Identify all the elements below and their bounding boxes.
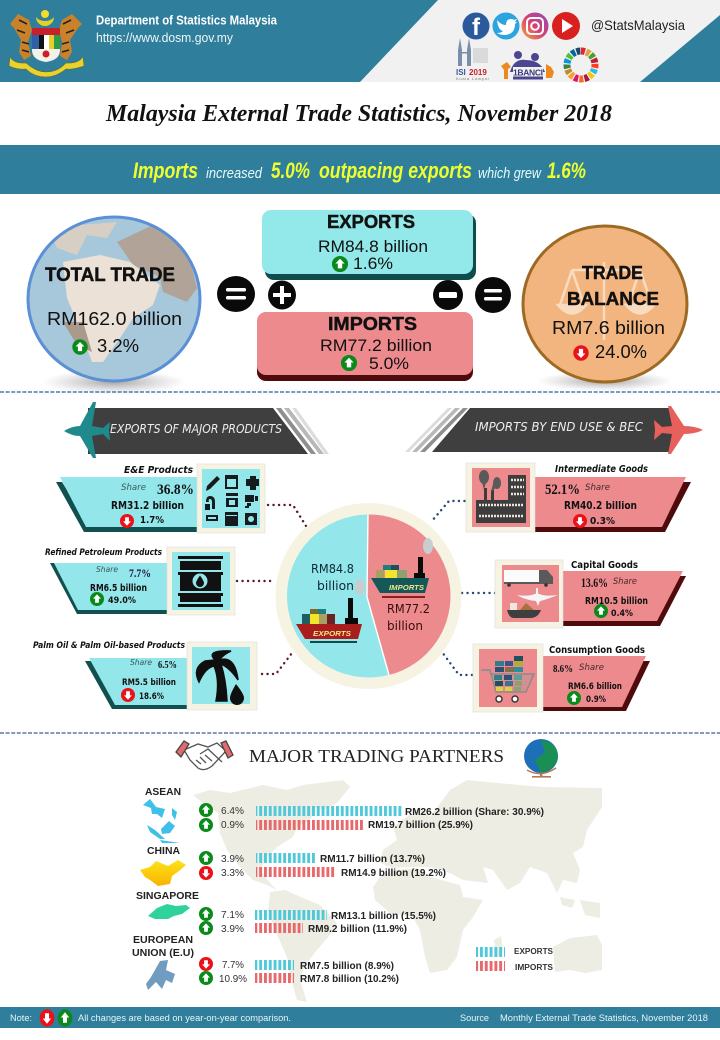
partner: ASEAN: 0.9% (221, 819, 244, 831)
footer band: Monthly External Trade Statistics, November 2018 (500, 1013, 708, 1023)
panel: consumption goods (473, 644, 650, 712)
panel: refined petroleum: 49.0% (108, 596, 136, 606)
logo: ISI 2019: Kuala Lumpur (456, 76, 490, 81)
icon: equals right (475, 277, 511, 313)
icon: Singapore map (148, 904, 190, 919)
background: world map (193, 780, 602, 1002)
panel: refined petroleum: RM6.5 billion (90, 583, 147, 594)
partner: Singapore: 3.9% (221, 923, 244, 935)
header organisation text: Department of Statistics Malaysia (96, 14, 278, 28)
partner: Singapore (136, 890, 436, 935)
icon: EU map (146, 960, 175, 990)
panel: palm oil: 6.5% (158, 660, 177, 671)
panel: palm oil: Share (130, 658, 152, 667)
headline banner: which grew (478, 165, 542, 182)
icon: twitter (492, 12, 520, 40)
partner: Singapore: 7.1% (221, 909, 244, 921)
header organisation text (96, 14, 278, 45)
icon: handshake (176, 741, 233, 770)
footer band: Note: (10, 1013, 32, 1023)
panel: exports total: RM84.8 billion (318, 237, 428, 256)
footer band: Source (460, 1013, 489, 1023)
headline banner: Imports (133, 158, 198, 183)
icon: truck plane ship (495, 560, 563, 628)
partner: Singapore: RM9.2 billion (11.9%) (308, 923, 407, 935)
heading: imports by end use: IMPORTS BY END USE & BEC (475, 419, 643, 434)
panel: E&E products: 1.7% (140, 515, 164, 526)
icon: ASEAN map (143, 799, 180, 843)
panel: total trade globe (28, 217, 200, 394)
partner: ASEAN: ASEAN (145, 786, 181, 798)
headline banner: outpacing exports (319, 158, 472, 183)
panel: capital goods: RM10.5 billion (585, 596, 648, 607)
panel: consumption goods: 0.9% (586, 695, 606, 705)
icon: export ship: EXPORTS (313, 631, 351, 638)
connector dots imports (431, 501, 496, 675)
panel: capital goods: 13.6% (581, 576, 608, 590)
headline banner: increased (206, 165, 263, 182)
chart: exports imports pie: RM77.2 (387, 601, 430, 616)
icon: electronics grid (197, 464, 265, 533)
chart: exports imports pie: billion (317, 578, 354, 593)
partner: European Union: RM7.8 billion (10.2%) (300, 973, 399, 985)
icon: factory (466, 463, 535, 532)
icon: import ship (371, 538, 433, 598)
panel: consumption goods: Consumption Goods (549, 645, 645, 656)
panel: palm oil: Palm Oil & Palm Oil-based Products (33, 641, 186, 651)
panel: intermediate goods: RM40.2 billion (564, 500, 637, 512)
logo: ISI 2019 (456, 38, 490, 81)
panel: trade balance: BALANCE (567, 289, 659, 309)
partner: China: 3.9% (221, 853, 244, 865)
partner: Singapore: RM13.1 billion (15.5%) (331, 910, 436, 922)
panel: trade balance: RM7.6 billion (552, 318, 665, 338)
legend: IMPORTS (515, 963, 554, 972)
panel: trade balance: 24.0% (595, 342, 647, 362)
connector dots exports (237, 505, 306, 674)
panel: capital goods: 0.4% (611, 609, 633, 619)
heading: imports by end use (405, 406, 703, 454)
panel: E&E products: E&E Products (124, 465, 193, 476)
panel: E&E products: RM31.2 billion (111, 500, 184, 512)
icon: palm tree and oil drop (187, 642, 257, 710)
icon: equals left (217, 276, 255, 312)
headline banner: 5.0% (271, 158, 310, 183)
panel: imports total: RM77.2 billion (320, 336, 432, 355)
icon: desk globe (524, 739, 558, 778)
panel: palm oil: 18.6% (139, 692, 164, 702)
partner: China: CHINA (147, 845, 180, 857)
footer band (0, 1007, 720, 1028)
icon: facebook (462, 12, 490, 41)
panel: intermediate goods: Intermediate Goods (555, 464, 648, 475)
panel: consumption goods: 8.6% (553, 664, 573, 675)
panel: intermediate goods: Share (585, 483, 610, 493)
legend: EXPORTS (514, 947, 554, 956)
icon: teal plane (64, 402, 110, 458)
panel: exports total (262, 210, 476, 280)
panel: refined petroleum: 7.7% (129, 566, 151, 580)
logo: 1BANCI (501, 51, 554, 80)
icon: plus (268, 280, 296, 310)
chart: exports imports pie: RM84.8 (311, 561, 354, 576)
panel: palm oil (33, 641, 257, 710)
panel: total trade globe: 3.2% (97, 336, 139, 356)
footer band: All changes are based on year-on-year comparison. (78, 1013, 291, 1023)
icon: youtube (552, 12, 580, 40)
partner: Singapore: SINGAPORE (136, 890, 199, 902)
icon: minus (433, 280, 463, 310)
social handle: @StatsMalaysia (591, 17, 685, 33)
panel: intermediate goods: 0.3% (590, 516, 615, 527)
headline banner (0, 145, 720, 194)
partner: ASEAN: RM26.2 billion (Share: 30.9%) (405, 806, 544, 818)
partner: European Union: 10.9% (219, 973, 247, 985)
partner: ASEAN: RM19.7 billion (25.9%) (368, 819, 473, 831)
partner: European Union: UNION (E.U) (132, 947, 194, 959)
icon: balance scale (558, 262, 654, 340)
icon: shopping cart (473, 644, 543, 712)
header band (0, 0, 720, 82)
icon: import ship: IMPORTS (389, 585, 424, 592)
logo: ISI 2019: ISI (456, 68, 466, 77)
icon: China map (140, 860, 186, 886)
partner: European Union: RM7.5 billion (8.9%) (300, 960, 394, 972)
panel: trade balance (523, 226, 687, 391)
panel: total trade globe: TOTAL TRADE (45, 265, 175, 286)
icon: coat of arms (9, 10, 84, 77)
panel: refined petroleum (45, 547, 235, 615)
partner: European Union: EUROPEAN (133, 934, 193, 946)
icon: facebook: f (472, 14, 481, 41)
panel: capital goods: Capital Goods (571, 560, 638, 571)
panel: imports total: 5.0% (369, 354, 409, 373)
partner: European Union: 7.7% (222, 959, 244, 971)
panel: consumption goods: RM6.6 billion (568, 682, 622, 692)
partner: China (140, 845, 446, 886)
icon: oil barrel (167, 547, 235, 615)
partner: European Union (132, 934, 399, 990)
icon: red plane (654, 406, 703, 454)
panel: refined petroleum: Share (96, 565, 118, 574)
partner: China: RM14.9 billion (19.2%) (341, 867, 446, 879)
title: Malaysia External Trade Statistics, November 2018 (105, 101, 612, 127)
icon: export ship (296, 579, 365, 643)
logo: SDG wheel (567, 51, 595, 79)
partner: ASEAN (143, 786, 544, 843)
panel: E&E products: Share (121, 483, 146, 493)
panel: total trade globe: RM162.0 billion (47, 309, 182, 329)
panel: exports total: EXPORTS (327, 212, 415, 232)
icon: instagram (522, 12, 548, 40)
panel: capital goods (495, 560, 686, 628)
panel: palm oil: RM5.5 billion (122, 678, 176, 688)
panel: E&E products (56, 464, 265, 533)
logo: ISI 2019: 2019 (469, 68, 487, 77)
panel: refined petroleum: Refined Petroleum Products (45, 548, 163, 558)
logo: 1BANCI: 1BANCI (513, 68, 543, 78)
partner: ASEAN: 6.4% (221, 805, 244, 817)
panel: capital goods: Share (613, 577, 637, 587)
partner: China: RM11.7 billion (13.7%) (320, 853, 425, 865)
header organisation text: https://www.dosm.gov.my (96, 30, 233, 45)
panel: exports total: 1.6% (353, 254, 393, 273)
panel: imports total (257, 312, 473, 381)
heading: major trading partners: MAJOR TRADING PARTNERS (249, 746, 504, 766)
legend (476, 947, 554, 972)
panel: imports total: IMPORTS (328, 314, 417, 334)
panel: trade balance: TRADE (582, 263, 643, 283)
heading: exports of major products: EXPORTS OF MAJOR PRODUCTS (110, 422, 282, 436)
panel: intermediate goods: 52.1% (545, 482, 580, 498)
partner: China: 3.3% (221, 867, 244, 879)
headline banner: 1.6% (547, 158, 586, 183)
panel: consumption goods: Share (579, 663, 604, 673)
chart: exports imports pie: billion (387, 618, 423, 633)
panel: intermediate goods (466, 463, 691, 532)
heading: exports of major products (64, 402, 329, 458)
panel: E&E products: 36.8% (157, 482, 194, 498)
chart: exports imports pie (276, 503, 462, 689)
